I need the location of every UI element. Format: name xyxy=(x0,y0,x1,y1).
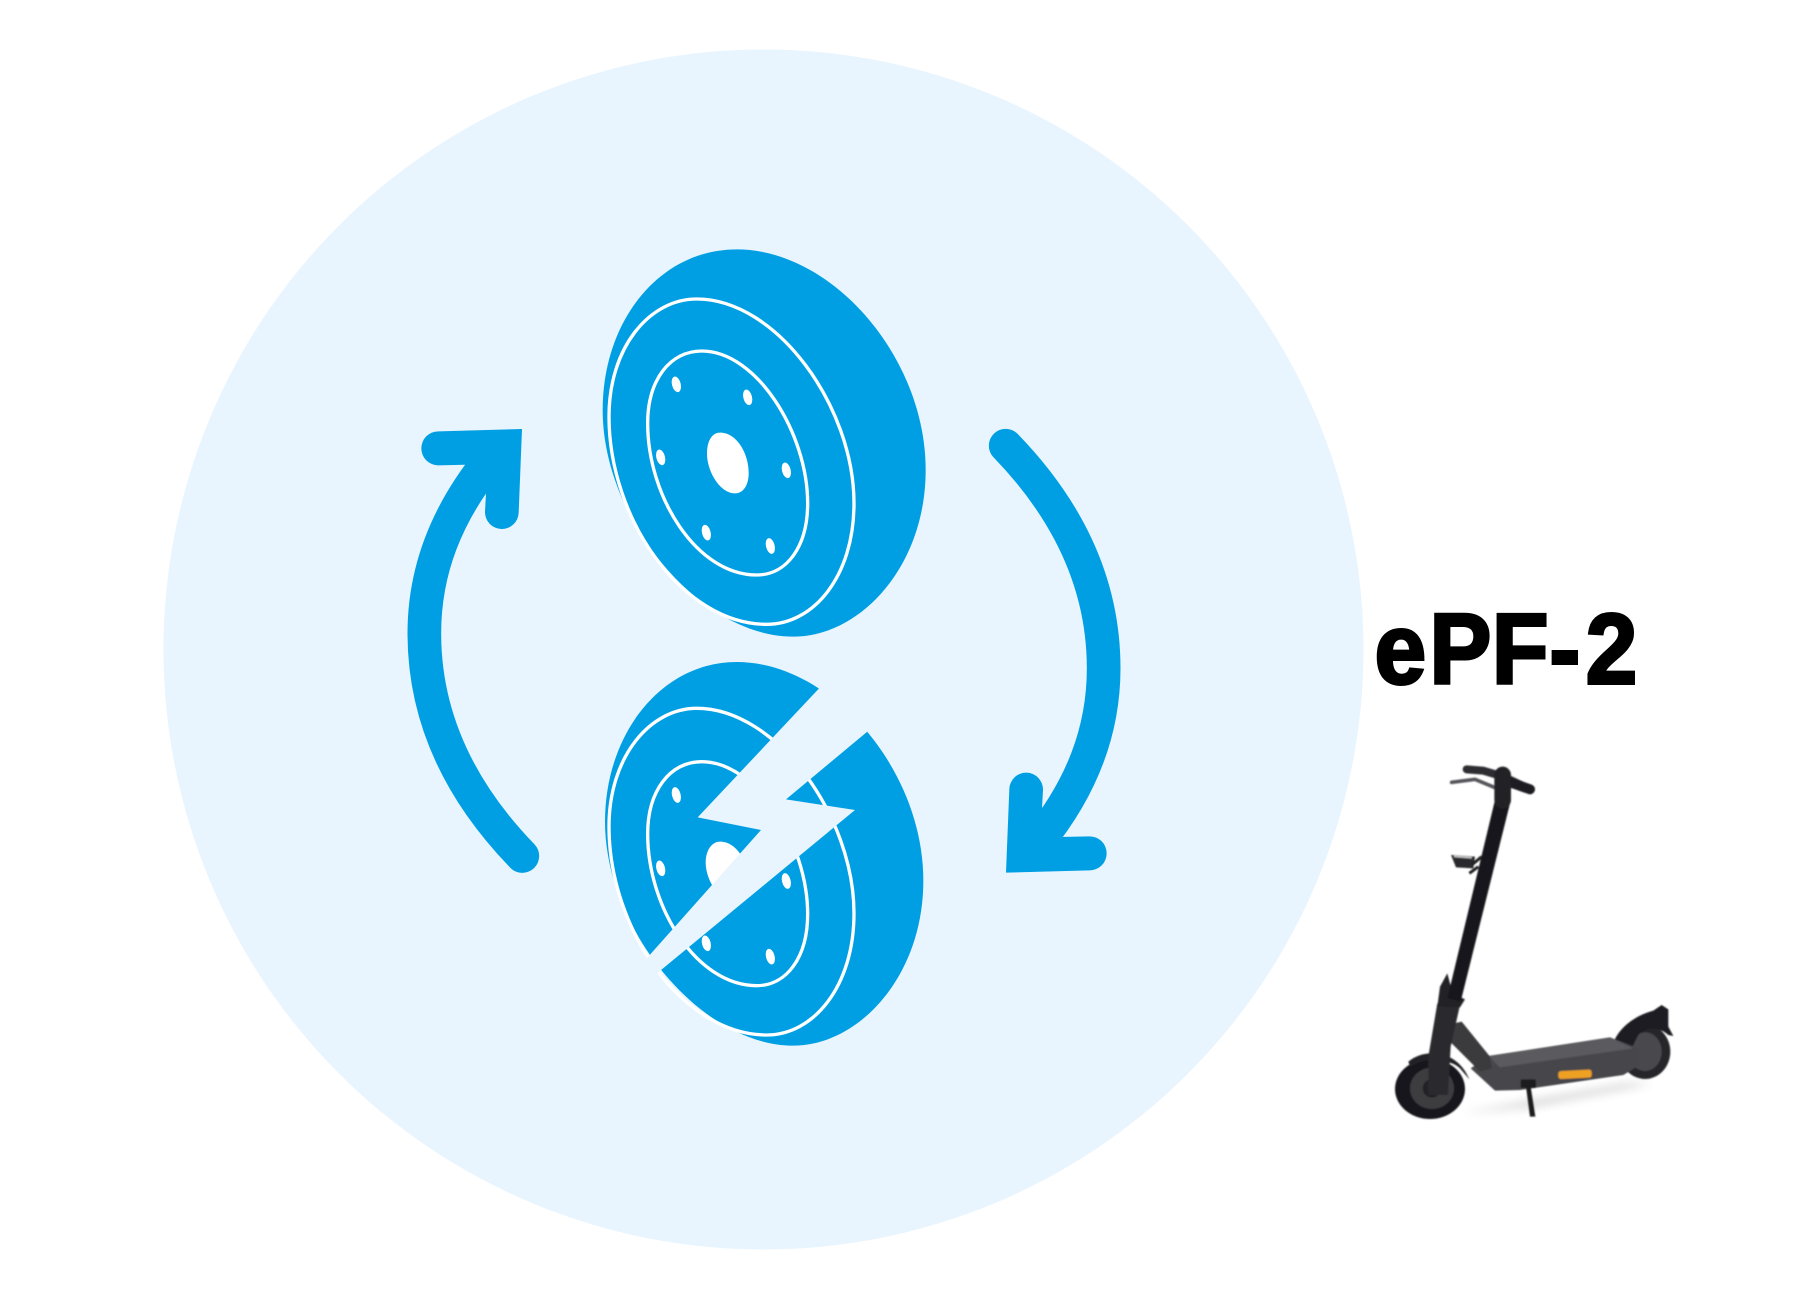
handlebar xyxy=(1452,769,1530,800)
scooter illustration xyxy=(1395,769,1673,1119)
front fender xyxy=(1408,1053,1469,1079)
folding clamp xyxy=(1437,973,1465,1007)
stem xyxy=(1447,800,1510,1002)
wheel silhouette xyxy=(605,662,923,1046)
arrow: right, pointing down xyxy=(1006,446,1107,873)
rear wheel xyxy=(1620,1024,1670,1079)
headlight xyxy=(1451,855,1482,873)
orange reflector xyxy=(1558,1069,1592,1079)
deck top surface xyxy=(1488,1037,1633,1067)
outer rim ring xyxy=(609,299,854,624)
icon: broken wheel xyxy=(605,662,923,1046)
fork xyxy=(1428,1003,1460,1095)
inner rim ring xyxy=(648,762,808,986)
front wheel xyxy=(1395,1059,1465,1119)
deck xyxy=(1471,1037,1640,1091)
wheel silhouette xyxy=(603,249,926,637)
arrow shaft xyxy=(424,460,522,856)
hub hole xyxy=(707,433,749,493)
hub hole xyxy=(706,842,749,902)
bolt holes xyxy=(655,376,792,555)
kickstand xyxy=(1521,1079,1536,1117)
outer rim ring xyxy=(609,708,854,1035)
rear fender xyxy=(1613,1005,1673,1048)
arrow head xyxy=(1006,773,1107,873)
bolt holes xyxy=(655,786,792,965)
down tube xyxy=(1450,1022,1492,1072)
product label: ePF-2 xyxy=(1375,594,1637,705)
arrow: left, pointing up xyxy=(421,429,522,856)
background circle xyxy=(164,50,1364,1250)
ground shadow xyxy=(1460,1083,1653,1113)
inner rim ring xyxy=(648,351,808,575)
lightning crack xyxy=(633,663,893,985)
icon: intact wheel xyxy=(603,249,926,637)
arrow head xyxy=(421,429,522,529)
arrow shaft xyxy=(1006,446,1104,842)
